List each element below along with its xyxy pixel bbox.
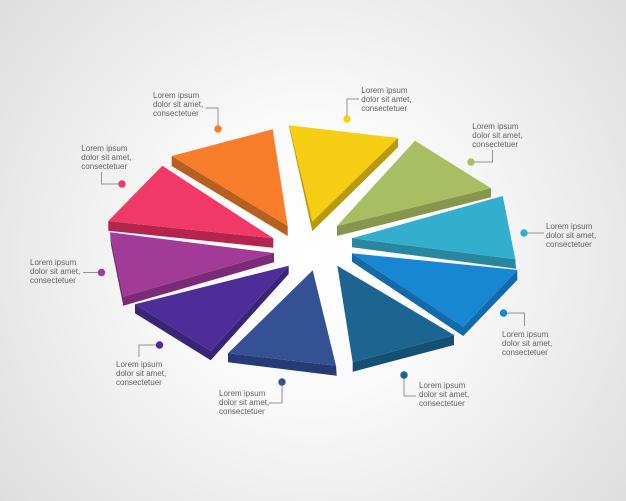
callout: yellow: dolor sit amet, (361, 95, 412, 104)
callout: red: Lorem ipsum (81, 144, 128, 153)
callout: navy: consectetuer (219, 407, 265, 416)
callout: yellow: consectetuer (361, 104, 407, 113)
segment: olive green (337, 141, 491, 236)
segment: yellow (289, 125, 398, 231)
callout: teal: Lorem ipsum (546, 222, 593, 231)
callout: orange: Lorem ipsum (153, 91, 200, 100)
callout: red: consectetuer (81, 162, 127, 171)
callout: blue (500, 309, 552, 357)
callout: red (81, 144, 132, 188)
callout: blue: Lorem ipsum (502, 330, 549, 339)
callout: purple: consectetuer (116, 378, 162, 387)
callout: teal: dolor sit amet, (546, 231, 596, 240)
callout: dark teal: dolor sit amet, (419, 390, 469, 399)
segment: blue (352, 253, 517, 336)
segment: dark teal (337, 266, 454, 372)
callout: purple (116, 341, 166, 387)
callout: orange: consectetuer (153, 109, 199, 118)
callout: navy (219, 378, 286, 416)
callout: teal: consectetuer (546, 240, 592, 249)
callout: magenta (30, 258, 105, 285)
callout: magenta: dolor sit amet, (30, 267, 80, 276)
callout: teal (520, 222, 596, 249)
callout: olive green: dolor sit amet, (472, 131, 523, 140)
callout: purple: Lorem ipsum (116, 360, 163, 369)
callout: navy: Lorem ipsum (219, 389, 266, 398)
callout: navy: dolor sit amet, (219, 398, 269, 407)
callout: blue: dolor sit amet, (502, 339, 552, 348)
callout: dark teal (400, 371, 469, 408)
callout: blue: consectetuer (502, 348, 548, 357)
callout: orange: dolor sit amet, (153, 100, 203, 109)
callout: orange (153, 91, 222, 133)
callout: olive green: consectetuer (472, 140, 518, 149)
segment: navy (228, 270, 337, 376)
segment: magenta (110, 232, 274, 306)
callout: magenta: Lorem ipsum (30, 258, 77, 267)
callout: purple: dolor sit amet, (116, 369, 166, 378)
segment: orange (172, 129, 288, 236)
callout: yellow: Lorem ipsum (361, 86, 408, 95)
callout: dark teal: consectetuer (419, 399, 465, 408)
callout: magenta: consectetuer (30, 276, 76, 285)
callout: dark teal: Lorem ipsum (419, 381, 466, 390)
segment: purple (135, 266, 289, 360)
callout: olive green: Lorem ipsum (472, 122, 519, 131)
segment: teal (352, 196, 516, 269)
callout: red: dolor sit amet, (81, 153, 132, 162)
callout: yellow (343, 86, 412, 123)
callout: olive green (467, 122, 523, 166)
segment: red (108, 166, 273, 248)
